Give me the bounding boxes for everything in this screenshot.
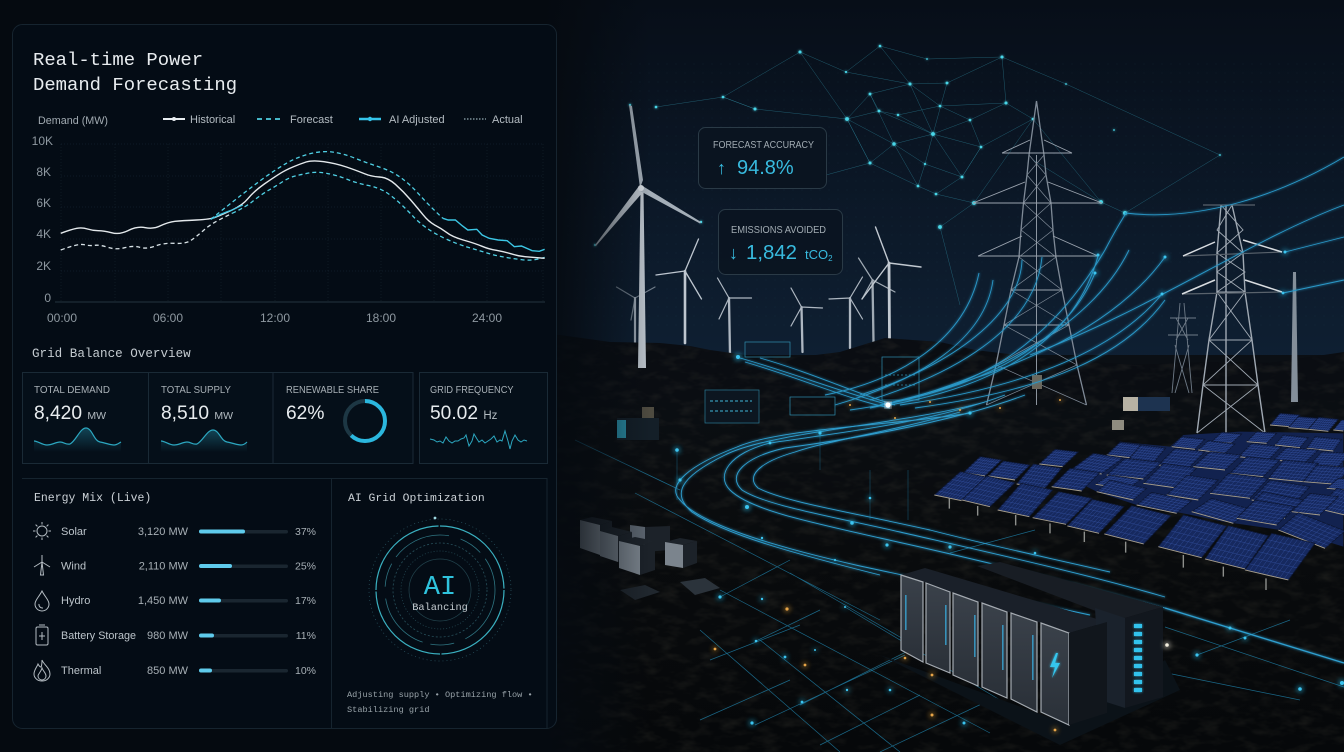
card: grid frequency: 50.02 Hz <box>430 403 498 424</box>
warm ground lights <box>714 399 1169 731</box>
chart legend: Forecast <box>290 114 333 126</box>
ground vegetation texture <box>610 342 1344 752</box>
row: thermal: Thermal <box>61 665 101 677</box>
row: wind: Wind <box>61 560 86 572</box>
gauge centre text: AI <box>424 573 456 603</box>
cabinet fronts <box>901 575 1069 725</box>
callout: forecast accuracy: ↑ <box>717 158 726 178</box>
callout: emissions avoided <box>718 210 842 274</box>
cabinet status strips <box>905 595 1034 680</box>
row: thermal: 850 MW <box>147 665 189 677</box>
cabinet roof <box>901 568 1107 633</box>
y axis title: Demand (MW) <box>38 115 108 127</box>
chart gridlines <box>55 144 545 302</box>
transmission tower right <box>1182 205 1282 433</box>
ground network mesh <box>575 430 1344 752</box>
row: thermal: 10% <box>295 665 316 677</box>
turbine 5 <box>829 277 862 348</box>
y axis labels: 0 <box>44 291 51 305</box>
solar panel field <box>934 413 1344 590</box>
section heading: grid balance: Grid Balance Overview <box>32 347 191 361</box>
x axis labels: 24:00 <box>472 311 502 325</box>
heading: AI Grid Optimization <box>348 493 485 505</box>
panel frame <box>12 24 556 728</box>
icon: sun <box>33 522 51 540</box>
row: solar: 37% <box>295 526 316 538</box>
forecast dashed white <box>61 213 232 250</box>
AI blend segment <box>211 205 243 219</box>
card: total demand: 8,420 MW <box>34 403 106 424</box>
callout: forecast accuracy <box>698 128 826 188</box>
icon: water drop <box>35 591 49 611</box>
status text: Adjusting supply • Optimizing flow • <box>347 690 533 700</box>
x axis labels: 06:00 <box>153 311 183 325</box>
icon: battery <box>36 625 48 645</box>
network nodes <box>594 45 1221 246</box>
x axis labels <box>47 311 502 325</box>
chart legend <box>163 114 523 126</box>
lit building left <box>617 407 659 440</box>
callout: forecast accuracy: FORECAST ACCURACY <box>713 140 814 151</box>
row: battery storage: 980 MW <box>147 630 189 642</box>
card: renewable share: RENEWABLE SHARE <box>286 385 379 396</box>
hill buildings and holographic frames <box>580 342 1170 600</box>
callout: forecast accuracy: 94.8% <box>737 157 794 179</box>
y axis labels <box>32 134 53 305</box>
platform <box>880 655 1180 745</box>
card: total demand: TOTAL DEMAND <box>34 385 110 396</box>
card: total supply <box>161 385 247 452</box>
panel field backing <box>1087 432 1343 547</box>
title: Real-time Power <box>33 49 203 71</box>
y axis labels: 4K <box>36 227 51 241</box>
turbine 6 <box>858 258 895 342</box>
x axis labels: 12:00 <box>260 311 290 325</box>
lower panels frame <box>22 478 547 729</box>
sky <box>540 0 1344 370</box>
title <box>33 49 237 96</box>
ground <box>540 355 1344 752</box>
hills silhouette <box>540 335 1344 400</box>
card: total supply: 8,510 MW <box>161 403 233 424</box>
transmission tower left <box>973 101 1102 405</box>
chart legend: AI Adjusted <box>389 114 445 126</box>
forecast lower dashed cyan <box>232 172 545 260</box>
AI optimization panel <box>347 493 533 715</box>
utility pole <box>1291 272 1298 402</box>
y axis labels: 2K <box>36 259 51 273</box>
historical line <box>61 161 545 258</box>
card: total supply: TOTAL SUPPLY <box>161 385 231 396</box>
row: solar: Solar <box>61 526 87 538</box>
chart legend: Actual <box>492 114 523 126</box>
flow line band <box>676 395 1344 663</box>
rear cabinet with LEDs <box>1095 607 1163 708</box>
callout: emissions avoided: ↓ <box>729 243 738 263</box>
holographic frames <box>745 342 919 415</box>
heading: Energy Mix (Live) <box>34 492 151 505</box>
row: battery storage: 11% <box>296 630 316 642</box>
card: grid frequency: GRID FREQUENCY <box>430 385 514 396</box>
small cabinets left <box>580 517 720 600</box>
row: solar <box>33 522 316 540</box>
y axis labels: 6K <box>36 196 51 210</box>
turbine 7 <box>862 227 921 338</box>
chart legend: Historical <box>190 114 235 126</box>
row: wind: 25% <box>295 560 316 572</box>
y axis labels: 8K <box>36 165 51 179</box>
forecast upper dashed cyan <box>211 152 443 219</box>
cabinet side <box>1069 622 1107 725</box>
callout: emissions avoided: 2 <box>828 254 833 263</box>
lit building centre <box>1032 375 1170 430</box>
x axis labels: 18:00 <box>366 311 396 325</box>
card: total demand <box>34 385 121 452</box>
callout: emissions avoided: tCO <box>805 247 828 262</box>
status text <box>347 690 533 715</box>
status text: Stabilizing grid <box>347 705 430 715</box>
battery cabinets <box>880 562 1180 745</box>
distant tower <box>1168 303 1198 393</box>
row: hydro: 1,450 MW <box>138 595 189 607</box>
row: hydro: Hydro <box>61 595 90 607</box>
row: hydro <box>35 591 316 611</box>
title: Demand Forecasting <box>33 74 237 96</box>
row: wind <box>34 555 316 575</box>
turbine 4 <box>791 288 822 352</box>
icon: wind turbine <box>34 555 50 575</box>
row: solar: 3,120 MW <box>138 526 189 538</box>
cabinet back row roof <box>977 562 1163 618</box>
upper power flow fan <box>740 157 1344 410</box>
turbine 3 <box>718 278 752 355</box>
scene fade into panel <box>540 0 650 752</box>
turbine 8 <box>616 287 655 345</box>
star dot grid <box>560 60 1344 330</box>
glowing nodes on ground <box>675 250 1344 725</box>
panel support posts <box>949 498 1266 590</box>
card: grid frequency <box>430 385 527 449</box>
holographic block <box>705 390 759 423</box>
card: renewable share <box>286 385 385 441</box>
main wind turbine <box>595 105 701 368</box>
AI radial gauge <box>369 517 511 661</box>
row: battery storage <box>36 625 316 645</box>
row: wind: 2,110 MW <box>139 560 189 572</box>
y axis labels: 10K <box>32 134 53 148</box>
energy mix panel <box>33 492 316 681</box>
card: renewable share: 62% <box>286 403 324 424</box>
icon: flame <box>34 660 50 681</box>
chart curves <box>61 152 545 260</box>
left dashboard panel <box>12 24 556 729</box>
AI adjusted line <box>443 218 545 251</box>
x axis labels: 00:00 <box>47 311 77 325</box>
flow hub <box>885 402 891 408</box>
scene: night energy landscape <box>540 0 1344 752</box>
turbine 2 <box>656 239 702 343</box>
callout: emissions avoided: 1,842 <box>746 242 797 264</box>
row: thermal <box>34 660 316 681</box>
donut gauge <box>345 401 385 441</box>
chart: demand forecast <box>32 114 545 325</box>
lightning bolt <box>1050 653 1060 678</box>
neural network constellation <box>656 46 1220 305</box>
AI optimization panel: Balancing <box>412 602 468 614</box>
card frames <box>22 372 548 464</box>
row: battery storage: Battery Storage <box>61 630 136 642</box>
callout: emissions avoided: EMISSIONS AVOIDED <box>731 225 826 236</box>
row: hydro: 17% <box>295 595 316 607</box>
far wind turbines <box>616 227 921 355</box>
